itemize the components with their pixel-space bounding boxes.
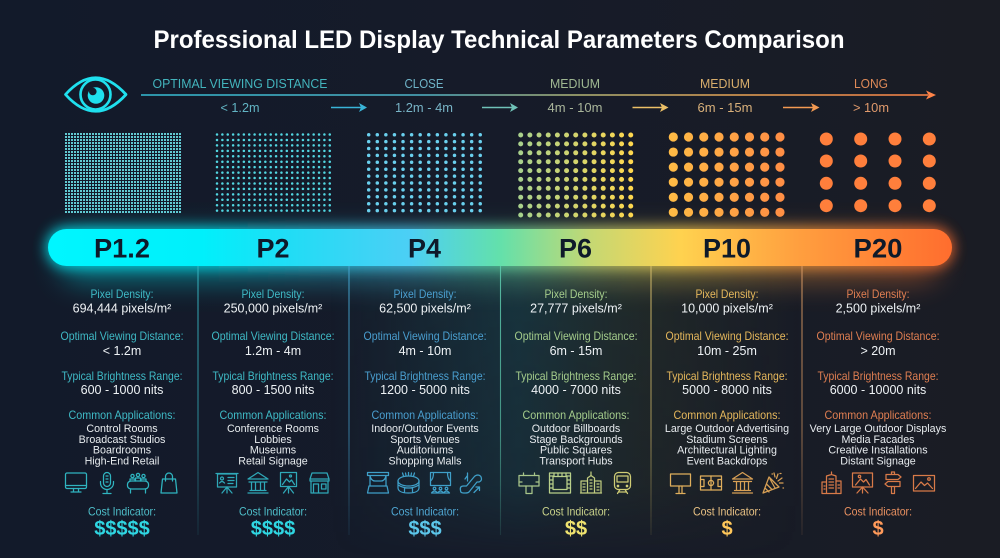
- applications: Media Facades: [841, 434, 915, 446]
- pixel density: [681, 288, 773, 316]
- viewing distance: [60, 330, 184, 358]
- applications: Indoor/Outdoor Events: [371, 423, 479, 435]
- viewing distance: Optimal Viewing Distance:: [364, 330, 486, 343]
- arrow 3: [632, 103, 668, 112]
- icon: museum building: [248, 472, 268, 493]
- applications: Large Outdoor Advertising: [665, 423, 789, 435]
- pixel density: Pixel Density:: [544, 288, 608, 301]
- pixel density: Pixel Density:: [242, 288, 304, 301]
- arrow 2: [482, 103, 518, 112]
- applications: Common Applications:: [220, 409, 326, 422]
- icon: presentation board: [216, 474, 238, 493]
- applications: Broadcast Studios: [79, 434, 165, 446]
- icon: billboard: [519, 473, 539, 494]
- cost: Cost Indicator:: [239, 506, 307, 518]
- applications: Stage Backgrounds: [529, 434, 623, 446]
- brightness: Typical Brightness Range:: [364, 370, 486, 383]
- applications: [522, 409, 630, 468]
- pixel density: [836, 288, 920, 316]
- brightness: 5000 - 8000 nits: [682, 383, 772, 397]
- cost: $: [872, 518, 884, 540]
- main distance arrow: [141, 90, 936, 100]
- scale label: optimal viewing distance: OPTIMAL VIEWING DISTANCE: [152, 77, 328, 91]
- pixel density: 2,500 pixels/m²: [836, 302, 920, 316]
- cost: $: [721, 518, 733, 540]
- cost: [88, 506, 156, 540]
- viewing distance: > 20m: [860, 344, 896, 358]
- viewing distance: 6m - 15m: [550, 344, 602, 358]
- icon: stage: [368, 472, 388, 493]
- panel: P4: [364, 288, 486, 540]
- viewing distance: Optimal Viewing Distance:: [60, 330, 184, 343]
- brightness: 800 - 1500 nits: [232, 383, 314, 397]
- icon: eye: [66, 78, 126, 111]
- pixel density: 62,500 pixels/m²: [379, 302, 471, 316]
- column dividers: [198, 266, 802, 535]
- applications: Common Applications:: [522, 409, 630, 422]
- range: below 1.2m: < 1.2m: [220, 101, 260, 115]
- pixel density: Pixel Density:: [90, 288, 154, 301]
- brightness: [818, 370, 938, 397]
- panel: P10: [665, 288, 789, 540]
- icon: escalator: [460, 473, 482, 493]
- icon: monitor: [66, 473, 86, 492]
- icon: auditorium: [430, 472, 450, 493]
- brightness: [62, 370, 182, 397]
- pixel density: [73, 288, 171, 316]
- panel: P20: [810, 288, 946, 540]
- cost: [542, 506, 610, 540]
- pixel grid P1.2: [65, 133, 181, 214]
- viewing distance: [666, 330, 788, 358]
- icon: soccer field: [700, 476, 722, 490]
- cost: Cost Indicator:: [693, 506, 761, 518]
- viewing distance: Optimal Viewing Distance:: [666, 330, 788, 343]
- viewing distance: Optimal Viewing Distance:: [514, 330, 638, 343]
- brightness: [212, 370, 334, 397]
- arrow 1: [331, 103, 367, 112]
- pitch bar: [48, 229, 952, 266]
- glow around bar: [46, 227, 954, 282]
- brightness: 4000 - 7000 nits: [531, 383, 621, 397]
- icon: roadside billboard: [670, 474, 690, 494]
- applications: [68, 409, 176, 468]
- pitch label P2: P2: [256, 234, 290, 264]
- applications: High-End Retail: [85, 456, 159, 468]
- pixel density: 10,000 pixels/m²: [681, 302, 773, 316]
- brightness: Typical Brightness Range:: [818, 370, 938, 383]
- pixel density: 27,777 pixels/m²: [530, 302, 622, 316]
- panel: P6: [514, 288, 638, 540]
- pixel grid P10: [673, 137, 780, 212]
- applications: Shopping Malls: [388, 456, 462, 468]
- applications: Boardrooms: [93, 444, 151, 456]
- pixel density: Pixel Density:: [394, 288, 456, 301]
- applications: Conference Rooms: [227, 423, 319, 435]
- pixel grid P3: [369, 135, 480, 211]
- applications: Architectural Lighting: [677, 444, 777, 456]
- icon: city buildings: [580, 472, 602, 493]
- brightness: [666, 370, 788, 397]
- brightness: 1200 - 5000 nits: [380, 383, 470, 397]
- icon: shopping bag: [161, 473, 177, 493]
- viewing distance: Optimal Viewing Distance:: [212, 330, 334, 343]
- viewing distance: [212, 330, 334, 358]
- icon: signpost: [885, 472, 901, 494]
- pitch label P1.2: P1.2: [94, 234, 150, 264]
- applications: Distant Signage: [840, 456, 916, 468]
- icon: art easel: [280, 472, 296, 493]
- scale label: close: CLOSE: [404, 77, 444, 91]
- applications: [810, 409, 946, 468]
- applications: [220, 409, 326, 468]
- cost: $$$: [408, 518, 442, 540]
- cost: [391, 506, 459, 540]
- icon: landscape picture: [914, 476, 934, 491]
- pixel density: Pixel Density:: [846, 288, 910, 301]
- applications: Sports Venues: [390, 434, 460, 446]
- viewing distance: 1.2m - 4m: [245, 344, 301, 358]
- icon: storefront: [310, 473, 329, 493]
- scale label: long: LONG: [854, 77, 888, 91]
- viewing distance: < 1.2m: [103, 344, 141, 358]
- pitch label P20: P20: [854, 234, 902, 264]
- pixel grid P6: [521, 135, 631, 215]
- brightness: 6000 - 10000 nits: [830, 383, 926, 397]
- pitch label P4: P4: [408, 234, 441, 264]
- cost: Cost Indicator:: [88, 506, 156, 518]
- pixel density: 250,000 pixels/m²: [224, 302, 322, 316]
- pitch label P6: P6: [559, 234, 592, 264]
- applications: Outdoor Billboards: [532, 423, 620, 435]
- pixel density: [379, 288, 471, 316]
- cost: $$: [565, 518, 587, 540]
- brightness: Typical Brightness Range:: [666, 370, 788, 383]
- viewing distance: Optimal Viewing Distance:: [816, 330, 940, 343]
- arrow 4: [783, 103, 820, 112]
- viewing distance: [364, 330, 486, 358]
- scale label: medium 2: MEDIUM: [700, 77, 750, 91]
- icon: boardroom table: [128, 473, 148, 493]
- applications: [665, 409, 789, 468]
- icon: microphone: [100, 472, 114, 494]
- applications: Common Applications:: [824, 409, 932, 422]
- applications: Auditoriums: [397, 444, 453, 456]
- applications: Common Applications:: [372, 409, 478, 422]
- applications: Very Large Outdoor Displays: [810, 423, 946, 435]
- title: Professional LED Display Technical Parameters Comparison: [154, 26, 844, 54]
- brightness: Typical Brightness Range:: [516, 370, 636, 383]
- cost: [844, 506, 912, 540]
- pixel density: [224, 288, 322, 316]
- brightness: Typical Brightness Range:: [212, 370, 334, 383]
- brightness: [516, 370, 636, 397]
- applications: Creative Installations: [828, 444, 928, 456]
- viewing distance scale: [141, 77, 936, 115]
- icon: stadium: [398, 472, 419, 493]
- viewing distance: [514, 330, 638, 358]
- cost: Cost Indicator:: [391, 506, 459, 518]
- icon: easel picture: [852, 473, 872, 493]
- range: 6m to 15m: 6m - 15m: [698, 101, 752, 115]
- range: 1.2m to 4m: 1.2m - 4m: [395, 101, 453, 115]
- viewing distance: [816, 330, 940, 358]
- scale label: medium: MEDIUM: [550, 77, 600, 91]
- cost: [693, 506, 761, 540]
- applications: Event Backdrops: [687, 456, 767, 468]
- pixel density: [530, 288, 622, 316]
- pixel density: 694,444 pixels/m²: [73, 302, 171, 316]
- applications: [371, 409, 479, 468]
- applications: Transport Hubs: [539, 456, 613, 468]
- icon: party popper: [763, 473, 784, 493]
- cost: $$$$$: [94, 518, 150, 540]
- applications: Retail Signage: [238, 456, 308, 468]
- panel: P1.2: [60, 288, 184, 540]
- brightness: [364, 370, 486, 397]
- applications: Common Applications:: [674, 409, 780, 422]
- range: 4m to 10m: 4m - 10m: [548, 101, 602, 115]
- range: above 10m: > 10m: [853, 101, 889, 115]
- applications: Public Squares: [540, 444, 612, 456]
- brightness: Typical Brightness Range:: [62, 370, 182, 383]
- applications: Museums: [250, 444, 296, 456]
- icon: classical building: [732, 472, 752, 493]
- viewing distance: 4m - 10m: [399, 344, 451, 358]
- pixel density: Pixel Density:: [696, 288, 758, 301]
- applications: Control Rooms: [86, 423, 158, 435]
- cost: [239, 506, 307, 540]
- pixel grids: [65, 132, 936, 215]
- icon: train: [614, 472, 630, 494]
- pitch label P10: P10: [703, 234, 751, 264]
- icon: stage backdrop: [550, 473, 570, 493]
- panel: P2: [212, 288, 334, 540]
- cost: Cost Indicator:: [844, 506, 912, 518]
- applications: Stadium Screens: [686, 434, 768, 446]
- cost: $$$$: [251, 518, 295, 540]
- pixel grid P20: [820, 132, 936, 212]
- applications: Lobbies: [254, 434, 292, 446]
- cost: Cost Indicator:: [542, 506, 610, 518]
- icon: office building: [822, 472, 841, 494]
- pixel grid P2: [217, 134, 330, 211]
- applications: Common Applications:: [68, 409, 176, 422]
- viewing distance: 10m - 25m: [697, 344, 757, 358]
- brightness: 600 - 1000 nits: [81, 383, 163, 397]
